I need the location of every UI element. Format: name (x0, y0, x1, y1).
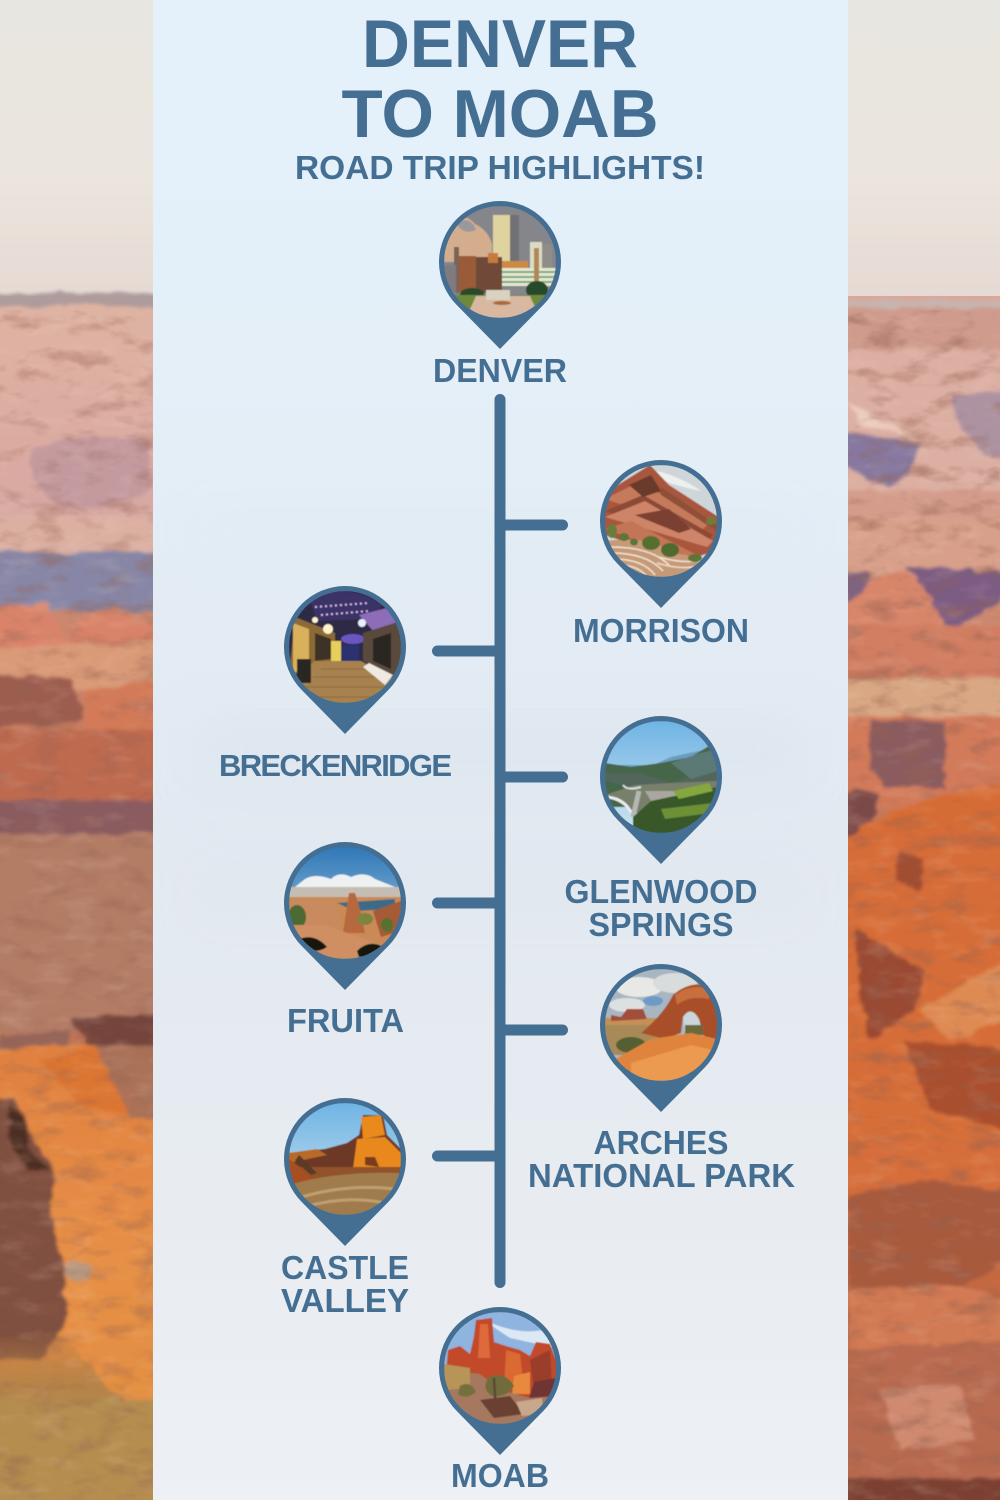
label: Castle Valley: CASTLE (281, 1249, 409, 1286)
stop: Denver (433, 201, 567, 389)
stop: Breckenridge (219, 586, 452, 783)
label: Castle Valley (281, 1249, 409, 1319)
title: TO MOAB (342, 76, 658, 152)
title (295, 6, 705, 186)
timeline with branches (432, 394, 568, 1288)
translucent center panel (153, 0, 848, 1500)
rock texture overlays (0, 310, 153, 1500)
label: Castle Valley: VALLEY (281, 1282, 409, 1319)
pin: Denver skyline (439, 201, 561, 349)
title: DENVER (362, 6, 638, 82)
label: Arches National Park: ARCHES (594, 1124, 728, 1161)
label: Arches National Park (528, 1124, 795, 1194)
pin: Glenwood valley (600, 716, 722, 864)
label: Denver: DENVER (433, 352, 567, 389)
label: Arches National Park: NATIONAL PARK (528, 1157, 795, 1194)
label: Breckenridge: BRECKENRIDGE (219, 748, 452, 783)
label: Glenwood Springs: GLENWOOD (564, 873, 758, 910)
pin: Colorado National Monument (284, 842, 406, 990)
stop: Arches National Park (528, 964, 795, 1194)
label: Fruita: FRUITA (287, 1002, 404, 1039)
stop: Glenwood Springs (564, 716, 758, 943)
stop: Morrison (573, 460, 749, 649)
pin: Breckenridge arcade (284, 586, 406, 734)
label: Glenwood Springs: SPRINGS (588, 906, 734, 943)
label: Moab: MOAB (451, 1457, 549, 1494)
stop: Castle Valley (281, 1098, 409, 1319)
label: Glenwood Springs (564, 873, 758, 943)
pin: Arches rock arch (600, 964, 722, 1112)
title: ROAD TRIP HIGHLIGHTS! (295, 149, 705, 186)
stop: Fruita (284, 842, 406, 1039)
pin: Castle Rock (284, 1098, 406, 1246)
label: Morrison: MORRISON (573, 612, 749, 649)
pin: Red Rocks (600, 460, 722, 608)
stop: Moab (439, 1307, 561, 1494)
pin: Moab red towers (439, 1307, 561, 1455)
